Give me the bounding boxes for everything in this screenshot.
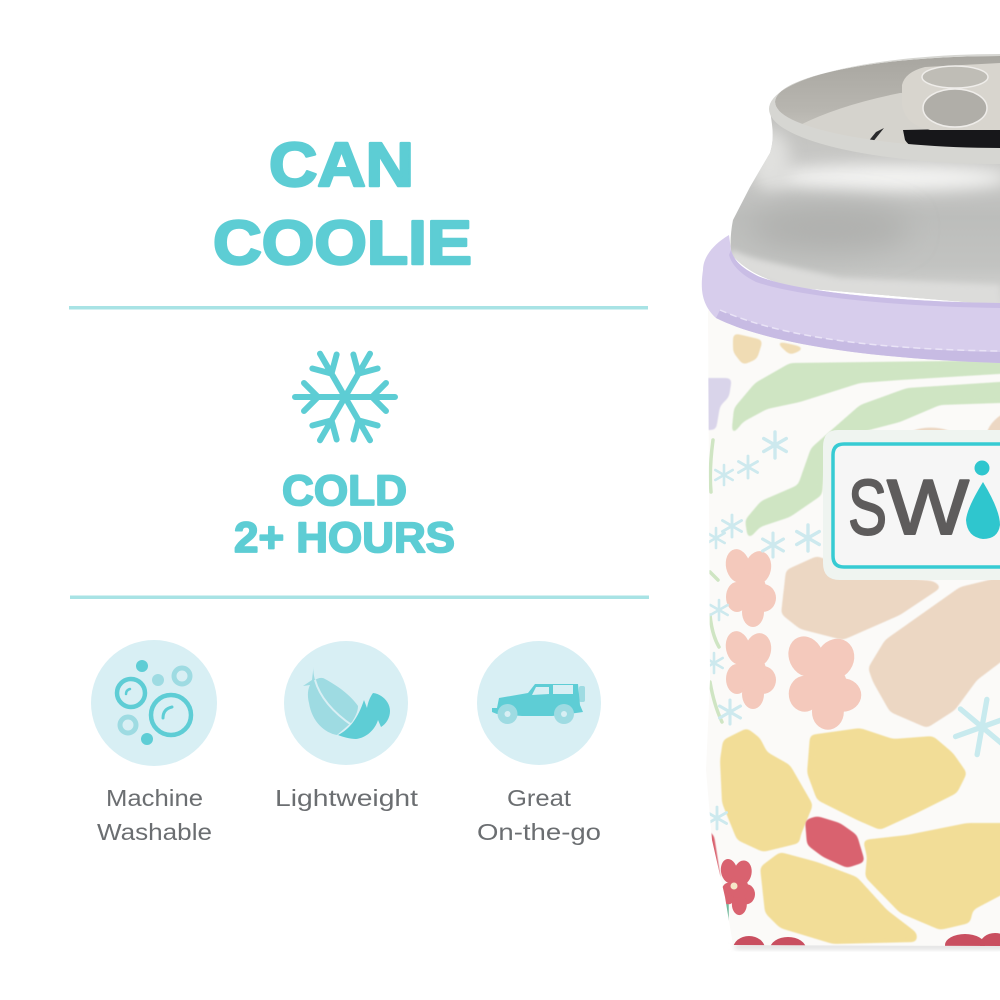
small red flower <box>719 857 755 915</box>
logo patch <box>823 430 1000 580</box>
sleeve floral pattern <box>700 333 1000 962</box>
cold duration text <box>234 467 455 562</box>
pale snowflakes <box>705 432 1000 829</box>
cold duration text: 2+ HOURS <box>234 514 455 562</box>
cold duration text: COLD <box>282 467 407 515</box>
title: CAN <box>269 131 414 200</box>
feature: lightweight <box>275 641 419 811</box>
feature: machine washable: Washable <box>97 819 212 845</box>
icon: jeep <box>492 684 585 724</box>
icon: feather <box>303 667 390 739</box>
can rim and lid <box>769 54 1000 164</box>
feature: great on-the-go: On-the-go <box>477 819 601 845</box>
feature: machine washable <box>91 640 217 845</box>
thin green leaves <box>710 440 727 925</box>
product: can coolie photo <box>700 54 1000 962</box>
pattern shapes: petals and leaves <box>700 333 1000 944</box>
logo lettering <box>848 463 969 551</box>
bottom red flower cut-offs <box>734 933 1000 946</box>
title <box>213 131 472 278</box>
feature: great on-the-go: Great <box>507 785 572 811</box>
icon: snowflake <box>295 347 395 447</box>
feature: machine washable: Machine <box>106 785 203 811</box>
pink flowers <box>723 547 861 730</box>
feature: great on-the-go <box>477 641 601 845</box>
feature: lightweight: Lightweight <box>275 785 419 811</box>
can pull tab <box>902 63 1000 130</box>
icon: bubbles <box>117 660 191 745</box>
can body <box>725 110 1000 310</box>
lilac collar <box>702 235 1000 363</box>
sleeve fabric <box>706 310 1000 946</box>
logo lettering: W <box>887 463 969 551</box>
title: COOLIE <box>213 209 472 278</box>
logo lettering: S <box>848 463 887 551</box>
logo water drop <box>966 460 1000 539</box>
